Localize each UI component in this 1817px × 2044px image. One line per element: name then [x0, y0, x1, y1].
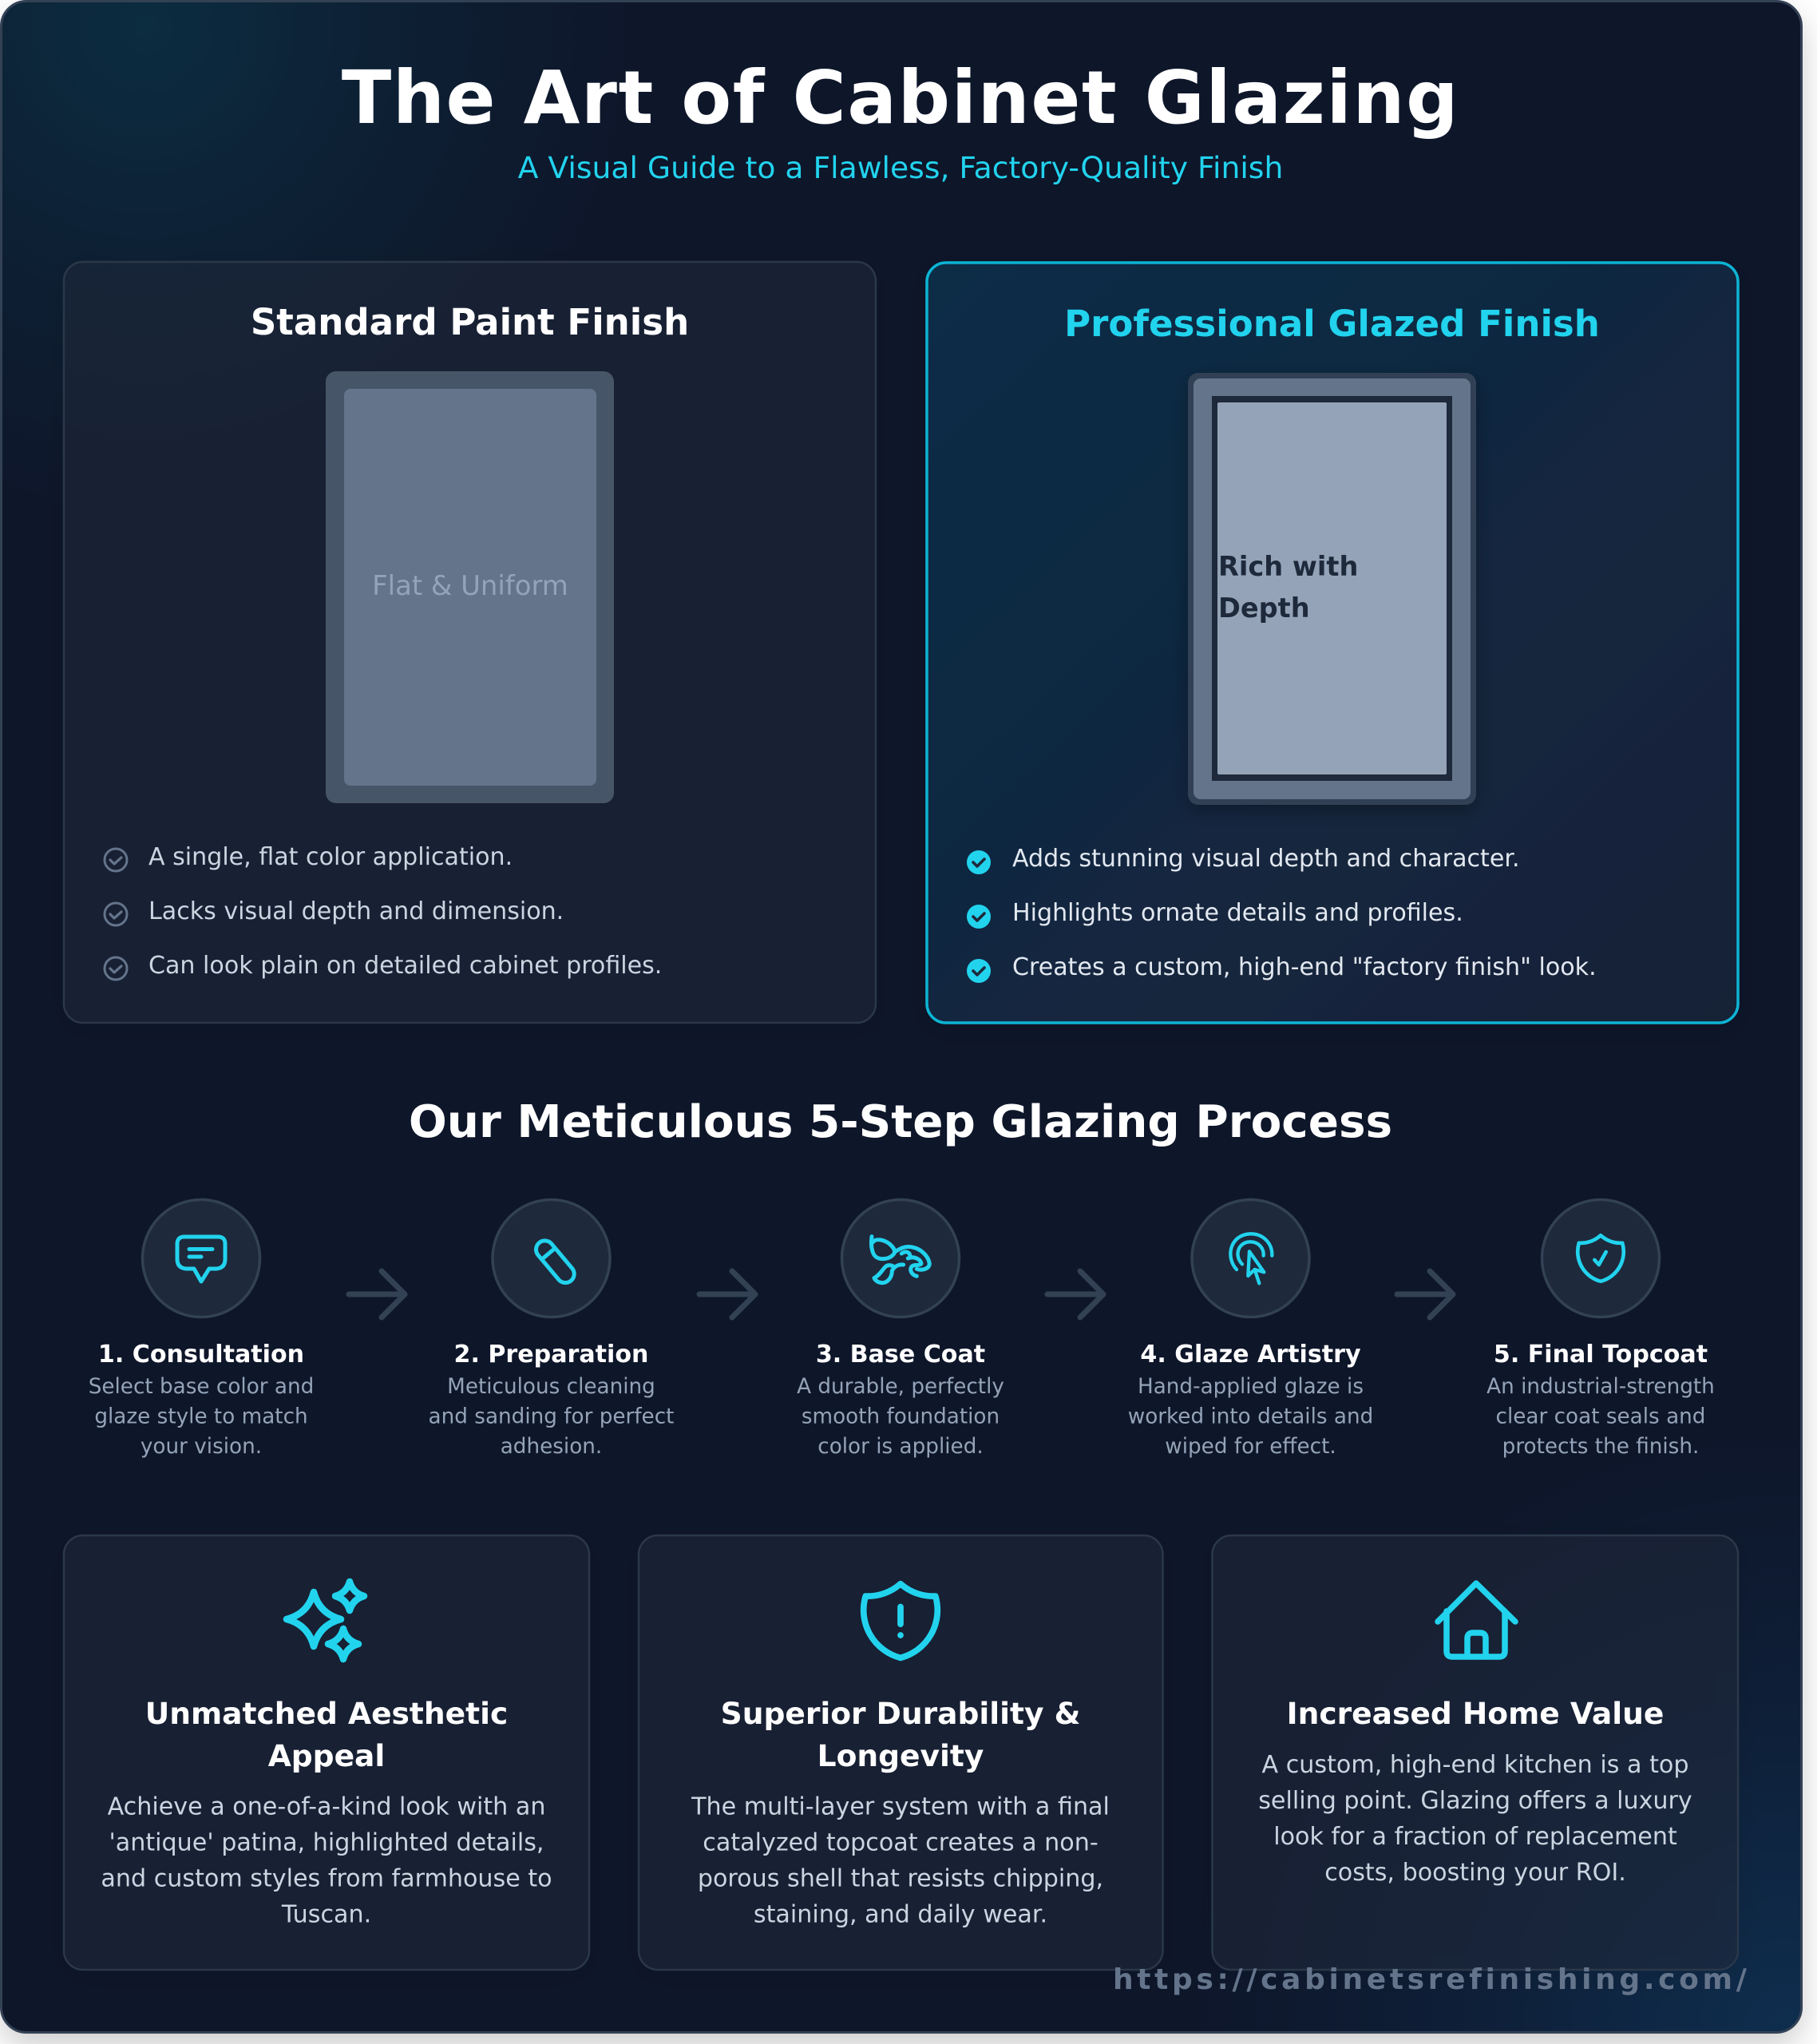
step 3 title: 3. Base Coat — [816, 1341, 985, 1369]
heading: standard paint finish: Standard Paint Finish — [251, 301, 689, 343]
bullet text 1: Adds stunning visual depth and character. — [1012, 845, 1520, 873]
benefit text: selling point. Glazing offers a luxury — [1258, 1787, 1692, 1815]
step 4: glaze artistry — [1128, 1199, 1373, 1459]
arrow 1 — [349, 1271, 405, 1317]
bullet icon 1 — [967, 850, 991, 874]
cabinet door: flat — [326, 371, 614, 803]
cabinet door: glazed: Rich with — [1218, 551, 1358, 582]
panel: standard paint finish — [64, 262, 876, 1023]
step 5 title: 5. Final Topcoat — [1494, 1341, 1708, 1369]
bullet text 3: Can look plain on detailed cabinet profiles. — [148, 952, 662, 980]
step 4 icon — [1192, 1199, 1309, 1317]
icon: sparkles — [287, 1582, 364, 1659]
bullet list: standard — [105, 843, 662, 980]
step 1 description: Select base color and — [89, 1375, 314, 1399]
benefit heading: Increased Home Value — [1287, 1696, 1664, 1731]
cabinet door: glazed: Depth — [1218, 592, 1310, 624]
benefit heading: Unmatched Aesthetic — [145, 1696, 508, 1731]
step 3 description: smooth foundation — [802, 1405, 1000, 1429]
heading: professional glazed finish: Professional Glazed Finish — [1064, 303, 1600, 345]
bullet icon 3 — [967, 959, 991, 983]
benefit text: porous shell that resists chipping, — [698, 1865, 1103, 1892]
step 3 icon — [841, 1199, 960, 1317]
step 1 icon — [142, 1199, 260, 1317]
benefit text: 'antique' patina, highlighted details, — [109, 1828, 544, 1857]
step 5 description: clear coat seals and — [1496, 1405, 1705, 1429]
cabinet door: glazed — [1188, 373, 1476, 805]
panel: aesthetic appeal — [64, 1535, 589, 1970]
step 1 description: glaze style to match — [94, 1405, 308, 1429]
step 1 title: 1. Consultation — [98, 1341, 304, 1369]
step 3 description: color is applied. — [817, 1435, 984, 1459]
section heading: process: Our Meticulous 5-Step Glazing Process — [409, 1096, 1392, 1148]
step 2 description: Meticulous cleaning — [447, 1375, 655, 1399]
step 4 title: 4. Glaze Artistry — [1140, 1341, 1361, 1369]
step 2 icon — [493, 1199, 610, 1317]
benefit text: costs, boosting your ROI. — [1324, 1859, 1626, 1887]
bullet list: glazed — [967, 845, 1597, 983]
step 1 description: your vision. — [141, 1435, 262, 1459]
step 5 description: An industrial-strength — [1486, 1375, 1715, 1399]
bullet icon 2 — [967, 905, 991, 929]
arrow 2 — [699, 1271, 755, 1317]
step 2 description: and sanding for perfect — [429, 1405, 674, 1429]
step 2: preparation — [429, 1199, 674, 1459]
bullet text 2: Highlights ornate details and profiles. — [1012, 899, 1463, 927]
bullet text 2: Lacks visual depth and dimension. — [148, 897, 564, 925]
cabinet door: flat: Flat & Uniform — [372, 570, 568, 601]
panel: durability — [639, 1535, 1162, 1970]
bullet icon 1 — [105, 849, 127, 871]
arrow 3 — [1047, 1271, 1103, 1317]
panel: home value — [1212, 1535, 1738, 1970]
bullet icon 2 — [105, 903, 127, 925]
arrow 4 — [1397, 1271, 1453, 1317]
benefit text: look for a fraction of replacement — [1273, 1823, 1677, 1851]
benefit text: staining, and daily wear. — [754, 1900, 1047, 1929]
step 5 icon — [1542, 1199, 1659, 1317]
step 5 description: protects the finish. — [1502, 1435, 1699, 1459]
footer url: https://cabinetsrefinishing.com/ — [1113, 1963, 1751, 1996]
icon: shield alert — [864, 1584, 937, 1658]
step 3: base coat — [797, 1199, 1004, 1459]
step 2 description: adhesion. — [501, 1435, 602, 1459]
benefit text: A custom, high-end kitchen is a top — [1262, 1751, 1688, 1779]
bullet text 3: Creates a custom, high-end "factory finish" look. — [1012, 953, 1597, 981]
benefit text: The multi-layer system with a final — [691, 1793, 1110, 1820]
step 5: final topcoat — [1486, 1199, 1715, 1459]
step 4 description: wiped for effect. — [1165, 1435, 1336, 1459]
benefit heading: Appeal — [268, 1738, 385, 1773]
benefit text: and custom styles from farmhouse to — [101, 1865, 552, 1892]
step 1: consultation — [89, 1199, 314, 1459]
subtitle: A Visual Guide to a Flawless, Factory-Quality Finish — [518, 150, 1283, 185]
title: The Art of Cabinet Glazing — [342, 55, 1459, 141]
step 3 description: A durable, perfectly — [797, 1375, 1004, 1399]
benefit heading: Longevity — [817, 1738, 984, 1773]
step 2 title: 2. Preparation — [454, 1341, 648, 1369]
step 4 description: Hand-applied glaze is — [1138, 1375, 1364, 1399]
benefit text: Achieve a one-of-a-kind look with an — [108, 1793, 545, 1820]
benefit heading: Superior Durability & — [721, 1696, 1080, 1731]
panel: professional glazed finish — [927, 263, 1738, 1023]
benefit text: catalyzed topcoat creates a non- — [703, 1828, 1099, 1857]
step 4 description: worked into details and — [1128, 1405, 1373, 1429]
benefit text: Tuscan. — [281, 1900, 371, 1929]
icon: house — [1438, 1583, 1515, 1657]
bullet icon 3 — [105, 957, 127, 980]
bullet text 1: A single, flat color application. — [148, 843, 513, 871]
